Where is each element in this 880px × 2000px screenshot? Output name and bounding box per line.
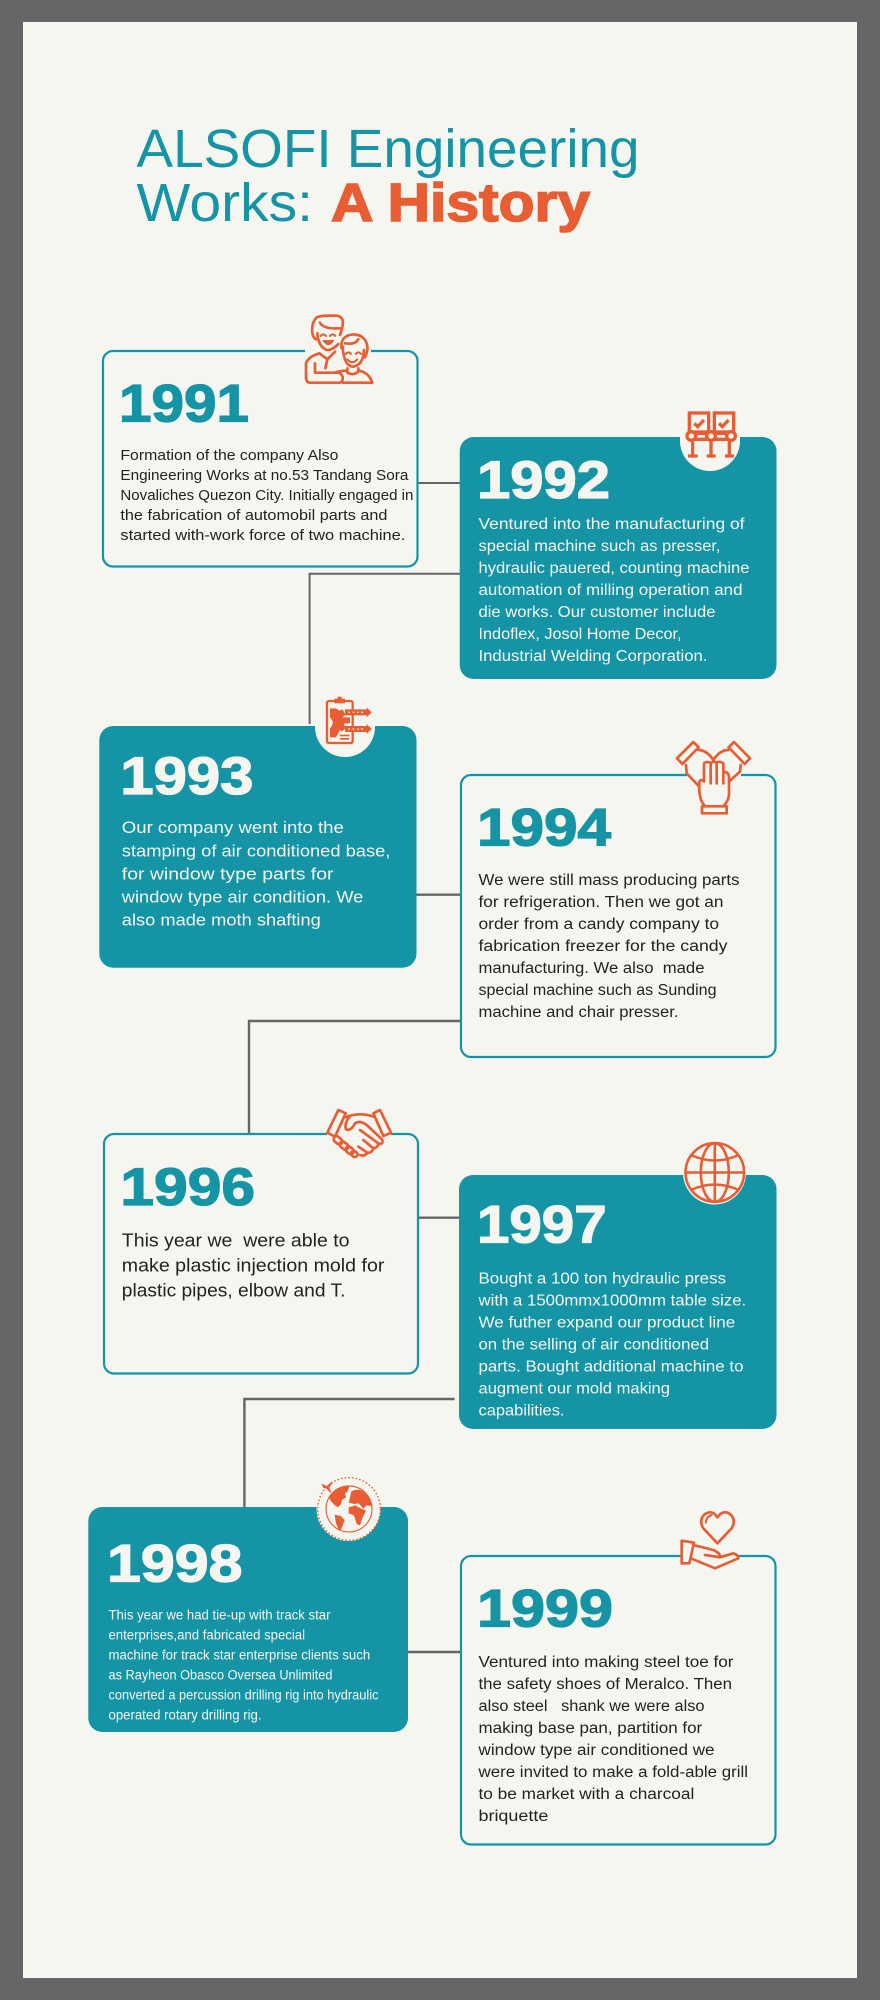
text 1994: We were still mass producing parts [478, 872, 740, 889]
year 1997: 1997 [477, 1196, 607, 1255]
text 1999: were invited to make a fold-able grill [477, 1764, 748, 1781]
text 1997 [477, 1270, 746, 1419]
card background 1992 [460, 437, 776, 679]
year 1992: 1992 [477, 451, 610, 510]
text 1996 [122, 1231, 384, 1301]
card outline 1994 [461, 775, 776, 1057]
text 1998: enterprises,and fabricated special [108, 1627, 305, 1642]
panel: 1992 [460, 405, 776, 679]
text 1991: Novaliches Quezon City. Initially engaged in [120, 488, 413, 504]
icon notch 1998 [316, 1477, 380, 1541]
panel: 1999 [461, 1512, 776, 1844]
text 1998: as Rayheon Obasco Oversea Unlimited [108, 1667, 332, 1682]
panel: 1991 [103, 316, 418, 566]
text 1998: This year we had tie-up with track star [108, 1607, 331, 1622]
text 1993 [121, 819, 390, 930]
title [136, 119, 640, 233]
card background 1993 [99, 726, 417, 968]
text 1991: Formation of the company Also [120, 448, 338, 464]
text 1997: capabilities. [478, 1402, 564, 1419]
text 1992: hydraulic pauered, counting machine [478, 560, 750, 577]
text 1994 [478, 872, 740, 1021]
panel: 1996 [104, 1110, 418, 1374]
text 1998 [108, 1607, 379, 1722]
text 1994: machine and chair presser. [478, 1004, 678, 1021]
text 1993: Our company went into the [122, 819, 344, 837]
text 1999 [477, 1654, 748, 1825]
icon: heart on open hand [682, 1512, 738, 1568]
connector: 1991 to 1992 [418, 482, 460, 484]
text 1994: fabrication freezer for the candy [478, 938, 728, 955]
connector: 1996 to 1997 [419, 1216, 460, 1219]
year 1994: 1994 [477, 799, 612, 858]
icon: globe [686, 1143, 744, 1202]
text 1999: briquette [478, 1808, 548, 1825]
text 1992: Indoflex, Josol Home Decor, [478, 626, 682, 643]
year 1993: 1993 [120, 747, 253, 806]
connector: 1994 to 1996 [249, 1021, 460, 1134]
icon: clipboard with gear and arrows [327, 697, 372, 743]
text 1992 [478, 516, 750, 665]
icon: world globe with plane [318, 1478, 380, 1540]
year 1999: 1999 [477, 1580, 613, 1639]
text 1997: with a 1500mmx1000mm table size. [477, 1292, 746, 1309]
text 1999: Ventured into making steel toe for [478, 1654, 734, 1671]
connector: 1997 to 1998 [244, 1399, 455, 1510]
card background 1998 [88, 1507, 408, 1732]
panel: 1998 [88, 1477, 408, 1732]
title: A History [331, 173, 590, 233]
panel: 1994 [461, 742, 776, 1057]
text 1997: Bought a 100 ton hydraulic press [478, 1270, 726, 1287]
icon: three stacked hands [677, 742, 750, 813]
card background 1997 [459, 1175, 776, 1429]
text 1993: also made moth shafting [122, 912, 321, 930]
text 1999: also steel shank we were also [478, 1698, 704, 1715]
notch top cover 1993 [315, 700, 375, 727]
text 1993: window type air condition. We [121, 889, 363, 907]
panel: 1993 [99, 697, 417, 968]
icon notch 1992 [680, 411, 740, 471]
title: Works: [136, 173, 313, 233]
icon: two smiling people [305, 316, 372, 383]
text 1993: stamping of air conditioned base, [122, 843, 390, 861]
text 1994: order from a candy company to [478, 916, 719, 933]
panel: 1997 [459, 1142, 776, 1429]
text 1992: Ventured into the manufacturing of [478, 516, 745, 533]
connector: 1992 to 1993 [310, 574, 460, 724]
icon notch 1997 [683, 1142, 746, 1204]
text 1994: for refrigeration. Then we got an [478, 894, 724, 911]
text 1999: making base pan, partition for [478, 1720, 702, 1737]
card outline 1999 [461, 1556, 776, 1844]
icon notch 1993 [315, 697, 375, 757]
year 1991: 1991 [119, 375, 249, 434]
card outline 1996 [104, 1134, 418, 1374]
text 1997: parts. Bought additional machine to [478, 1358, 744, 1375]
connector: 1998 to 1999 [408, 1651, 460, 1653]
text 1997: augment our mold making [478, 1380, 670, 1397]
text 1998: machine for track star enterprise clients such [108, 1647, 370, 1662]
text 1996: This year we were able to [122, 1231, 350, 1251]
text 1992: Industrial Welding Corporation. [478, 648, 708, 665]
connector: 1993 to 1994 [416, 894, 460, 896]
card outline 1991 [103, 351, 418, 566]
title: ALSOFI Engineering [136, 119, 640, 179]
text 1999: window type air conditioned we [477, 1742, 714, 1759]
text 1998: converted a percussion drilling rig into hydraulic [108, 1687, 379, 1702]
icon: handshake [327, 1110, 391, 1158]
text 1992: die works. Our customer include [478, 604, 716, 621]
text 1994: manufacturing. We also made [478, 960, 704, 977]
text 1991: started with-work force of two machine. [120, 528, 405, 544]
text 1999: to be market with a charcoal [478, 1786, 694, 1803]
text 1993: for window type parts for [122, 866, 334, 884]
text 1991: the fabrication of automobil parts and [120, 508, 387, 524]
text 1991 [120, 448, 413, 544]
text 1994: special machine such as Sunding [478, 982, 716, 999]
text 1992: automation of milling operation and [478, 582, 742, 599]
text 1999: the safety shoes of Meralco. Then [478, 1676, 732, 1693]
text 1996: plastic pipes, elbow and T. [122, 1281, 345, 1301]
year 1998: 1998 [107, 1535, 242, 1594]
notch top cover 1992 [680, 405, 740, 441]
icon: conveyor with checked boxes [687, 413, 735, 456]
text 1991: Engineering Works at no.53 Tandang Sora [120, 468, 409, 484]
text 1996: make plastic injection mold for [122, 1256, 384, 1276]
text 1997: We futher expand our product line [478, 1314, 735, 1331]
text 1992: special machine such as presser, [478, 538, 720, 555]
text 1997: on the selling of air conditioned [478, 1336, 709, 1353]
text 1998: operated rotary drilling rig. [108, 1707, 262, 1722]
year 1996: 1996 [120, 1158, 255, 1217]
